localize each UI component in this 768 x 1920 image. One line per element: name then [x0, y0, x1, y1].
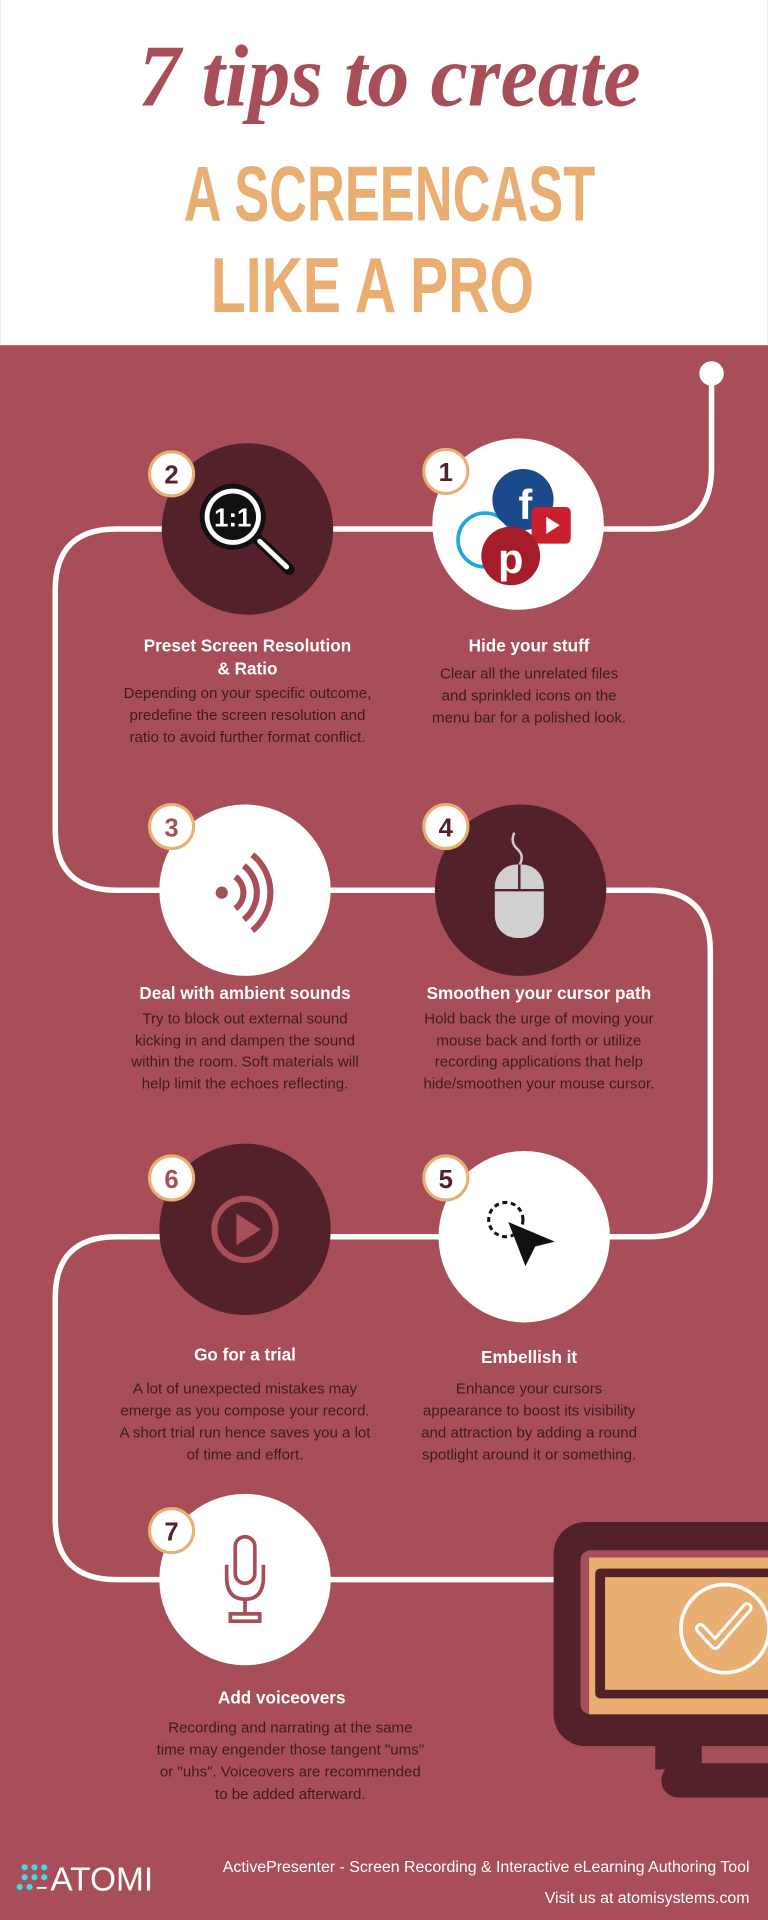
- icon: social: p: [498, 535, 523, 582]
- text: step 5: and attraction by adding a round: [421, 1425, 637, 1442]
- title: 7 tips to create: [138, 27, 641, 125]
- icon: microphone: [227, 1537, 263, 1621]
- text: step 4: Hold back the urge of moving your: [424, 1011, 653, 1028]
- path line: [55, 361, 724, 1580]
- text: step 4: hide/smoothen your mouse cursor.: [423, 1076, 654, 1093]
- step 1 circle: [424, 438, 604, 610]
- text: step 6: A lot of unexpected mistakes may: [133, 1380, 358, 1397]
- footer text: Visit us at atomisystems.com: [545, 1890, 750, 1907]
- footer text: [223, 1859, 750, 1907]
- text: step 7: Recording and narrating at the same: [168, 1720, 412, 1737]
- title: [138, 27, 641, 329]
- title: LIKE A PRO: [211, 241, 534, 329]
- text: step 1: and sprinkled icons on the: [442, 687, 617, 704]
- text: step 4: mouse back and forth or utilize: [436, 1033, 641, 1050]
- text: step 6: Go for a trial: [194, 1344, 296, 1364]
- text: step 7: time may engender those tangent "ums": [157, 1742, 424, 1759]
- text: step 2: Preset Screen Resolution: [144, 635, 351, 655]
- text: step 4: Smoothen your cursor path: [427, 983, 651, 1003]
- step 2 circle: [150, 443, 333, 615]
- text: step 6: A short trial run hence saves you a lot: [120, 1425, 371, 1442]
- step 6 circle: [150, 1144, 331, 1315]
- icon: play: [214, 1199, 276, 1260]
- text: step 7: Add voiceovers: [218, 1687, 346, 1707]
- text: step 6: of time and effort.: [187, 1447, 303, 1464]
- text: step 5: Enhance your cursors: [456, 1380, 602, 1397]
- text: step 5: [421, 1347, 637, 1464]
- text: step 3: [130, 983, 359, 1093]
- text: step 5: Embellish it: [481, 1347, 577, 1367]
- text: step 1: Clear all the unrelated files: [440, 665, 618, 682]
- text: step 6: [120, 1344, 371, 1464]
- step 7 circle: 7: [164, 1518, 179, 1546]
- text: step 5: spotlight around it or something.: [422, 1447, 636, 1464]
- text: step 3: Deal with ambient sounds: [139, 983, 351, 1003]
- step 4 circle: [424, 804, 606, 976]
- step 5 circle: 5: [439, 1166, 453, 1194]
- text: step 7: or "uhs". Voiceovers are recommended: [160, 1764, 421, 1781]
- step 5 circle: [424, 1151, 610, 1322]
- step 3 circle: 3: [164, 814, 179, 842]
- icon: social: [458, 469, 571, 585]
- text: step 2: Depending on your specific outcome,: [124, 685, 371, 702]
- logo: ATOMI: ATOMI: [50, 1862, 153, 1899]
- text: step 4: recording applications that help: [435, 1054, 643, 1071]
- icon: magnifier 1:1: 1:1: [214, 505, 251, 533]
- icon: monitor: [554, 1522, 768, 1798]
- footer text: ActivePresenter - Screen Recording & Interactive eLearning Authoring Tool: [223, 1859, 750, 1876]
- text: step 2: predefine the screen resolution and: [130, 707, 365, 724]
- text: step 1: menu bar for a polished look.: [432, 709, 626, 726]
- text: step 4: [423, 983, 654, 1093]
- icon: cursor: [489, 1202, 555, 1266]
- text: step 3: help limit the echoes reflecting.: [142, 1076, 348, 1093]
- text: step 2: ratio to avoid further format conflict.: [130, 729, 365, 746]
- text: step 7: to be added afterward.: [215, 1786, 366, 1803]
- step 2 circle: 2: [164, 462, 179, 490]
- text: step 6: emerge as you compose your record.: [120, 1403, 370, 1420]
- step 4 circle: 4: [439, 814, 454, 842]
- text: step 2: [124, 635, 371, 746]
- icon: sound waves: [216, 855, 270, 931]
- text: step 7: [157, 1687, 424, 1803]
- icon: mouse: [495, 833, 544, 938]
- text: step 5: appearance to boost its visibility: [423, 1403, 636, 1420]
- text: step 2: & Ratio: [218, 659, 277, 679]
- step 6 circle: 6: [164, 1166, 179, 1194]
- icon: social: f: [518, 481, 532, 528]
- step 3 circle: [150, 804, 331, 976]
- icon: magnifier 1:1: [200, 484, 289, 569]
- text: step 1: Hide your stuff: [469, 635, 590, 655]
- text: step 3: kicking in and dampen the sound: [135, 1033, 355, 1050]
- text: step 3: Try to block out external sound: [142, 1011, 348, 1028]
- text: step 3: within the room. Soft materials will: [130, 1054, 359, 1071]
- step 1 circle: 1: [439, 459, 453, 487]
- step 7 circle: [150, 1494, 331, 1665]
- text: step 1: [432, 635, 626, 726]
